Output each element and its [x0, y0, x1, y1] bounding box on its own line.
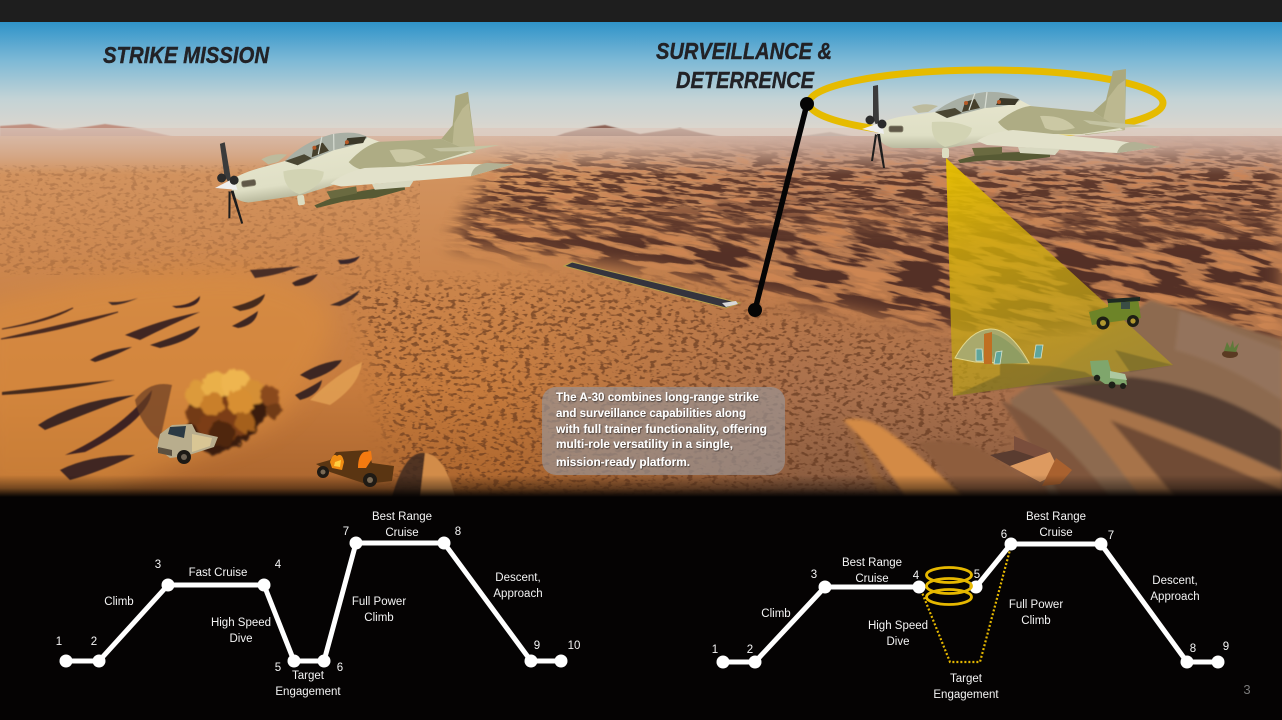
strike: white pickup: [157, 424, 218, 464]
desert scene: [0, 124, 1282, 496]
chart: strike mission profile: Descent,: [495, 572, 541, 584]
chart: surveillance mission profile: 8: [1190, 643, 1196, 655]
chart: strike mission profile: Dive: [229, 633, 253, 645]
chart: strike mission profile: Engagement: [275, 686, 341, 698]
icon: green jeep: [1089, 297, 1141, 330]
chart: strike mission profile: 2: [91, 636, 97, 648]
camp and vehicles in sensor cone: [953, 297, 1173, 396]
chart: strike mission profile: 8: [455, 526, 461, 538]
canopy: [935, 92, 1020, 118]
heading: strike mission: STRIKE MISSION: [103, 42, 269, 68]
icon: camp chairs: [976, 345, 1043, 364]
chart: strike mission profile: Full Power: [352, 596, 406, 608]
chart: strike mission profile: 4: [275, 559, 282, 571]
callout: A-30 summary: with full trainer functionality, offering: [555, 424, 767, 436]
top bar: [0, 0, 1282, 22]
chart: surveillance mission profile: Target: [950, 673, 983, 685]
chart: surveillance mission profile: Cruise: [855, 573, 889, 585]
wing: [977, 130, 1160, 153]
aircraft: surveillance: [862, 69, 1160, 168]
chart: surveillance mission profile: Descent,: [1152, 575, 1198, 587]
chart: surveillance mission profile: 5: [974, 569, 980, 581]
chart: strike mission profile: 7: [343, 526, 349, 538]
chart: surveillance mission profile: 4: [913, 570, 920, 582]
strike: burning pickup: [316, 450, 394, 487]
callout: A-30 summary: mission-ready platform.: [556, 457, 690, 469]
heading: surveillance and deterrence: SURVEILLANCE &: [656, 38, 832, 64]
chart: surveillance mission profile: Full Power: [1009, 599, 1063, 611]
chart: strike mission profile: 5: [275, 662, 281, 674]
chart: surveillance mission profile: 9: [1223, 641, 1229, 653]
chart: surveillance mission profile: Best Range: [842, 557, 902, 569]
tail fin: [1085, 69, 1126, 135]
callout: A-30 summary: The A-30 combines long-range strike: [556, 392, 759, 404]
camouflage: [998, 106, 1120, 134]
chart: surveillance mission profile: 3: [811, 569, 817, 581]
chart: strike mission profile: High Speed: [211, 617, 271, 629]
chart: surveillance mission profile: 2: [747, 644, 753, 656]
chart: strike mission profile: Climb: [364, 612, 394, 624]
chart: strike mission profile: 1: [56, 636, 62, 648]
propeller: [866, 85, 885, 168]
tailplane: [1083, 120, 1150, 128]
icon: tent: [955, 329, 1029, 364]
chart: surveillance mission profile: Dive: [886, 636, 910, 648]
scene bottom fade: [0, 475, 1282, 497]
chart: strike mission profile: [56, 511, 580, 698]
grainy ground: [0, 165, 1060, 495]
cone shadow: [953, 350, 1173, 396]
chart: surveillance mission profile: Cruise: [1039, 527, 1073, 539]
sky: [0, 22, 1282, 147]
nose gear: [942, 148, 949, 158]
callout: A-30 summary: multi-role versatility in a single,: [556, 439, 733, 451]
chart: surveillance mission profile: Climb: [761, 608, 791, 620]
surveillance orbit ring: [809, 70, 1163, 136]
chart: strike mission profile: 9: [534, 640, 540, 652]
chart: surveillance mission profile: Approach: [1150, 591, 1200, 603]
stores: [958, 152, 1050, 163]
chart: surveillance mission profile: 7: [1108, 530, 1114, 542]
map pin pole: [748, 97, 814, 317]
loiter orbit coils: [926, 568, 972, 604]
chart: surveillance mission profile: Climb: [1021, 615, 1051, 627]
small bush: [1222, 340, 1239, 358]
sensor cone: [946, 158, 1173, 396]
callout: A-30 summary: [542, 387, 785, 475]
chart: strike mission profile: Best Range: [372, 511, 432, 523]
chart: surveillance mission profile: High Speed: [868, 620, 928, 632]
page number: 3: [1243, 682, 1251, 697]
chart: strike mission profile: Climb: [104, 596, 134, 608]
intake: [889, 126, 903, 132]
chart: strike mission profile: 3: [155, 559, 161, 571]
spinner: [862, 122, 884, 134]
chart: surveillance mission profile: 6: [1001, 529, 1007, 541]
heading: surveillance and deterrence: DETERRENCE: [676, 67, 815, 93]
sand base: [0, 136, 1282, 497]
chart: strike mission profile: Fast Cruise: [189, 567, 247, 579]
strike: explosion: [185, 369, 282, 454]
chart: surveillance mission profile: [712, 511, 1229, 701]
chart: strike mission profile: Cruise: [385, 527, 419, 539]
fuselage: [878, 100, 1123, 148]
callout: A-30 summary: and surveillance capabilities along: [556, 408, 746, 420]
distant mountains: [0, 124, 850, 136]
left dune field: [0, 256, 455, 497]
chart: surveillance mission profile: Engagement: [933, 689, 999, 701]
bunker: [990, 436, 1072, 486]
dune ripples right: [442, 144, 1282, 342]
chart: surveillance mission profile: 1: [712, 644, 718, 656]
chart: strike mission profile: 10: [568, 640, 580, 652]
runway: [564, 262, 740, 308]
right foreground dunes: [843, 300, 1282, 497]
chart: strike mission profile: Target: [292, 670, 325, 682]
horizon haze: [0, 128, 1282, 175]
chart: surveillance mission profile: Best Range: [1026, 511, 1086, 523]
heading: surveillance and deterrence: [656, 38, 832, 93]
dorsal fairing: [912, 104, 938, 113]
aircraft: strike: [207, 87, 516, 227]
chart: strike mission profile: 6: [337, 662, 343, 674]
chart: strike mission profile: Approach: [493, 588, 543, 600]
icon: military truck: [1090, 360, 1127, 389]
